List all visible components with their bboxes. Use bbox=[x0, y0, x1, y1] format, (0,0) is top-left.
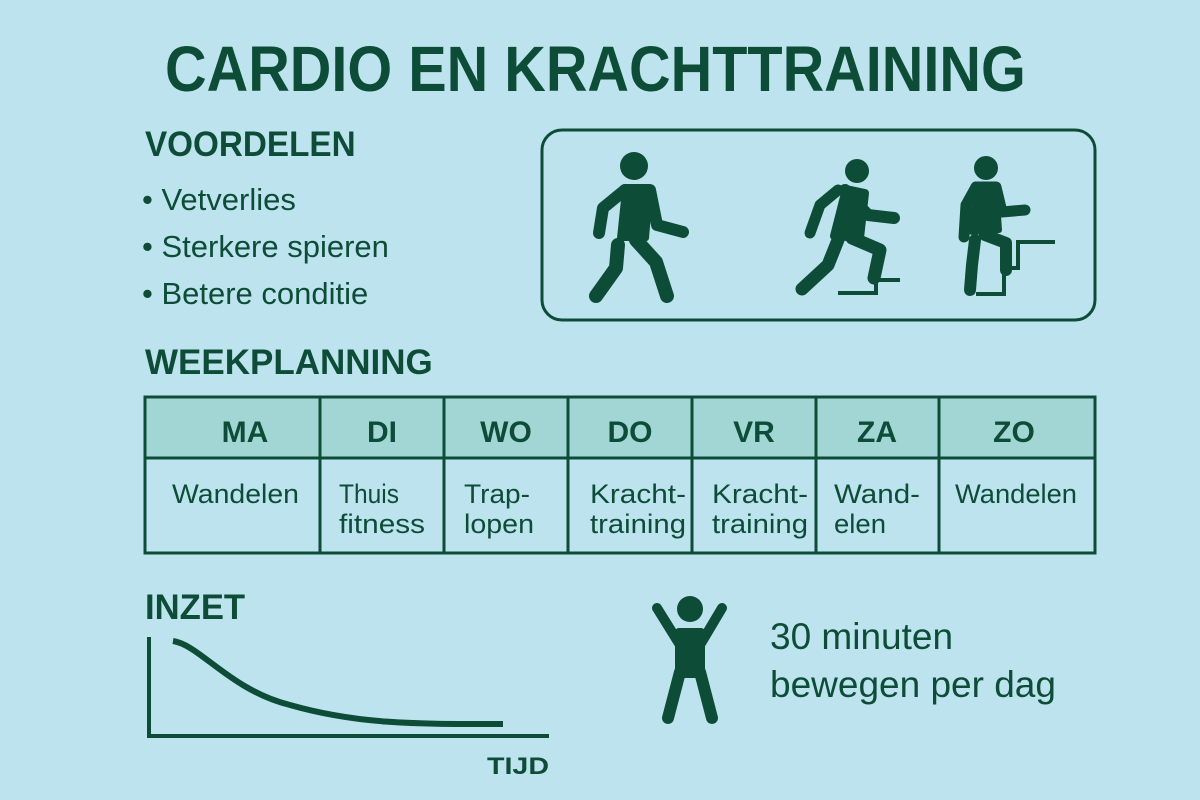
icon: stair runner bbox=[802, 159, 900, 293]
table: weekplanning: Wand- bbox=[834, 479, 920, 509]
icon: stair climber bbox=[964, 156, 1055, 294]
table: weekplanning: lopen bbox=[464, 509, 534, 539]
table: weekplanning: Trap- bbox=[464, 479, 530, 509]
heading: weekplanning: WEEKPLANNING bbox=[145, 343, 433, 382]
table: weekplanning: ZA bbox=[857, 416, 897, 449]
text: 30 minuten bewegen per dag bbox=[770, 616, 1056, 705]
benefits list: • Sterkere spieren bbox=[142, 229, 389, 264]
table: weekplanning: MA bbox=[222, 416, 268, 449]
heading: voordelen: VOORDELEN bbox=[145, 125, 356, 164]
title: CARDIO EN KRACHTTRAINING bbox=[165, 33, 1026, 105]
benefits list: • Betere conditie bbox=[142, 276, 368, 311]
chart: inzet over tijd: TIJD bbox=[487, 753, 549, 780]
table: weekplanning: DI bbox=[367, 416, 397, 449]
table: weekplanning: ZO bbox=[993, 416, 1035, 449]
table: weekplanning: VR bbox=[733, 416, 775, 449]
table: weekplanning: elen bbox=[834, 509, 886, 539]
table: weekplanning: DO bbox=[608, 416, 652, 449]
table: weekplanning: WO bbox=[480, 416, 532, 449]
benefits list bbox=[142, 182, 389, 311]
text: 30 minuten bewegen per dag: bewegen per dag bbox=[770, 664, 1056, 705]
table: weekplanning: Thuis bbox=[339, 479, 399, 509]
table: weekplanning: Wandelen bbox=[955, 479, 1077, 509]
benefits list: • Vetverlies bbox=[142, 182, 296, 217]
table: weekplanning: fitness bbox=[339, 509, 425, 539]
heading: inzet: INZET bbox=[145, 588, 245, 627]
icon: walker bbox=[596, 152, 683, 296]
text: 30 minuten bewegen per dag: 30 minuten bbox=[770, 616, 953, 657]
table: weekplanning: Kracht- bbox=[590, 479, 686, 509]
table: weekplanning: Kracht- bbox=[712, 479, 808, 509]
table: weekplanning: training bbox=[590, 509, 686, 539]
table: weekplanning: Wandelen bbox=[172, 479, 299, 509]
table: weekplanning: training bbox=[712, 509, 808, 539]
